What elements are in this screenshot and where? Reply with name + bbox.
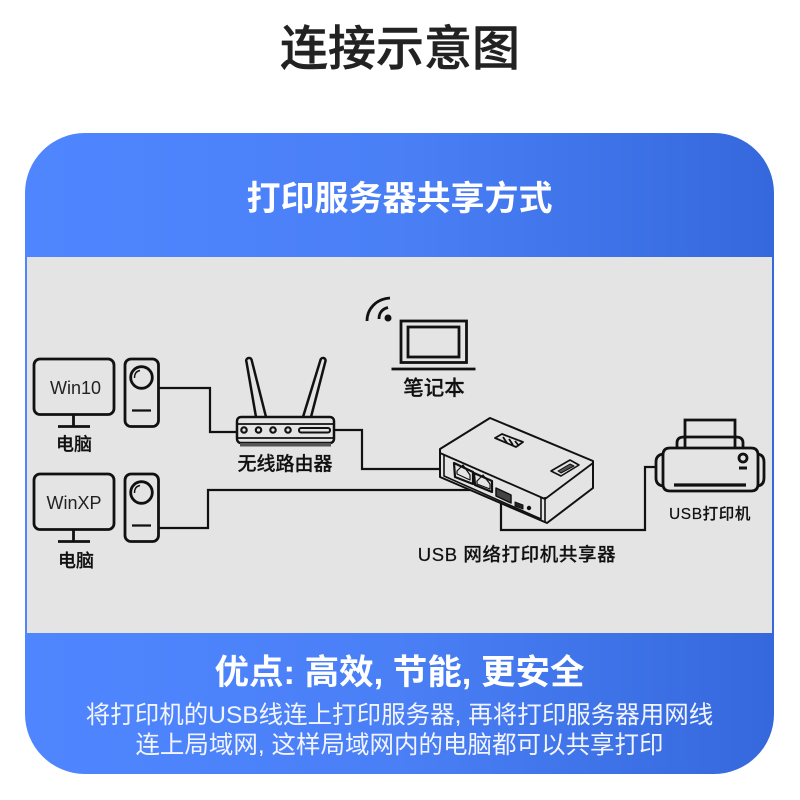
- cables: [159, 388, 657, 530]
- icon: wifi: [367, 298, 392, 322]
- label: computer 2: 电脑: [58, 551, 94, 571]
- router: [237, 358, 334, 446]
- label plate: [551, 460, 579, 476]
- monitor: WinXP: [34, 474, 114, 542]
- label: USB printer: USB打印机: [669, 505, 751, 523]
- RJ45 port 1: [454, 463, 473, 484]
- print server device: [440, 418, 593, 523]
- status lights window: [495, 434, 523, 447]
- advantages heading: 优点: 高效, 节能, 更安全: [215, 654, 584, 692]
- label: wireless router: 无线路由器: [237, 453, 333, 475]
- description text: [86, 702, 713, 759]
- RJ45 port 2: [474, 473, 492, 492]
- monitor: Win10: Win10: [50, 378, 101, 398]
- power jack: [515, 502, 523, 509]
- monitor: WinXP: WinXP: [46, 493, 102, 513]
- USB port: [496, 488, 511, 503]
- modem 1: [125, 359, 158, 426]
- label: USB network print sharer: USB 网络打印机共享器: [418, 544, 616, 565]
- monitor: Win10: [34, 359, 114, 426]
- label: computer 1: 电脑: [56, 434, 92, 454]
- description text: 连上局域网, 这样局域网内的电脑都可以共享打印: [135, 732, 664, 759]
- title: 连接示意图: [280, 23, 520, 76]
- icon: printer: [656, 420, 764, 491]
- modem 2: [125, 474, 158, 542]
- icon: laptop: [392, 321, 476, 369]
- label: laptop: 笔记本: [403, 377, 465, 400]
- description text: 将打印机的USB线连上打印服务器, 再将打印服务器用网线: [86, 702, 713, 729]
- panel: sharing mode: [25, 133, 774, 774]
- diagram background: [27, 257, 772, 633]
- panel heading: 打印服务器共享方式: [246, 180, 552, 218]
